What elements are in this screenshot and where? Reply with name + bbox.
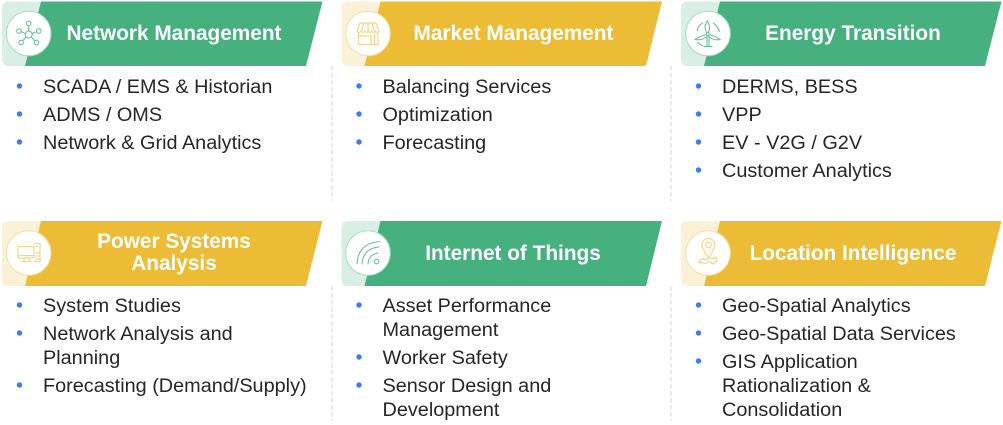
list: Energy Transition items: DERMS, BESS bbox=[722, 76, 858, 98]
panel: Market Management bbox=[342, 2, 662, 154]
list: Network Management items: ADMS / OMS bbox=[43, 104, 162, 126]
icon: wind turbine bbox=[695, 21, 720, 46]
list: Network Management items: SCADA / EMS & Historian bbox=[43, 76, 272, 98]
header tab: Power Systems Analysis bbox=[2, 221, 322, 286]
list: Power Systems Analysis items: System Studies bbox=[43, 295, 181, 317]
list: Location Intelligence items: Consolidation bbox=[722, 399, 842, 421]
panel: Internet of Things bbox=[342, 221, 662, 421]
header tab: Internet of Things bbox=[342, 221, 662, 286]
heading: Energy Transition bbox=[765, 22, 941, 45]
list: Market Management items: Forecasting bbox=[382, 132, 486, 154]
list: Location Intelligence items: Geo-Spatial Analytics bbox=[722, 295, 911, 317]
heading: Power Systems bbox=[97, 230, 251, 253]
heading: Network Management bbox=[67, 22, 282, 45]
list: Energy Transition items: EV - V2G / G2V bbox=[722, 132, 863, 154]
icon: wireless signal bbox=[357, 242, 380, 264]
list: Location Intelligence items bbox=[696, 295, 956, 421]
icon: network nodes bbox=[17, 21, 41, 45]
icon: map pin bbox=[698, 239, 717, 264]
list: Network Management items: Network & Grid Analytics bbox=[43, 132, 261, 154]
heading: Internet of Things bbox=[425, 242, 601, 265]
list: Power Systems Analysis items bbox=[17, 295, 307, 397]
list: Internet of Things items: Development bbox=[382, 399, 500, 421]
panel: Energy Transition bbox=[681, 2, 1002, 182]
panel: Power Systems Analysis bbox=[2, 221, 322, 397]
list: Network Management items bbox=[17, 76, 272, 154]
list: Location Intelligence items: Geo-Spatial Data Services bbox=[722, 323, 956, 345]
panel: Location Intelligence bbox=[681, 221, 1002, 421]
list: Market Management items bbox=[356, 76, 551, 154]
list: Energy Transition items bbox=[696, 76, 892, 182]
list: Internet of Things items: Worker Safety bbox=[382, 347, 508, 369]
list: Power Systems Analysis items: Network Analysis and bbox=[43, 323, 233, 345]
list: Internet of Things items: Sensor Design and bbox=[382, 375, 551, 397]
icon: market stall bbox=[357, 23, 379, 44]
header tab: Market Management bbox=[342, 2, 662, 66]
list: Power Systems Analysis items: Forecasting (Demand/Supply) bbox=[43, 375, 307, 397]
list: Energy Transition items: VPP bbox=[722, 104, 762, 126]
list: Location Intelligence items: GIS Application bbox=[722, 351, 858, 373]
list: Power Systems Analysis items: Planning bbox=[43, 347, 120, 369]
header tab: Network Management bbox=[2, 2, 322, 66]
list: Energy Transition items: Customer Analytics bbox=[722, 160, 892, 182]
list: Internet of Things items: Asset Performance bbox=[382, 295, 551, 317]
header tab: Power Systems Analysis: Analysis bbox=[131, 252, 217, 275]
header tab: Location Intelligence bbox=[681, 221, 1002, 286]
panel: Network Management bbox=[2, 2, 322, 154]
list: Market Management items: Optimization bbox=[382, 104, 493, 126]
list: Location Intelligence items: Rationalization & bbox=[722, 375, 871, 397]
list: Internet of Things items: Management bbox=[382, 319, 499, 341]
heading: Market Management bbox=[414, 22, 614, 45]
list: Internet of Things items bbox=[356, 295, 551, 421]
heading: Location Intelligence bbox=[750, 242, 956, 265]
icon: desktop computer bbox=[18, 244, 40, 262]
list: Market Management items: Balancing Services bbox=[382, 76, 551, 98]
header tab: Energy Transition bbox=[681, 2, 1002, 66]
